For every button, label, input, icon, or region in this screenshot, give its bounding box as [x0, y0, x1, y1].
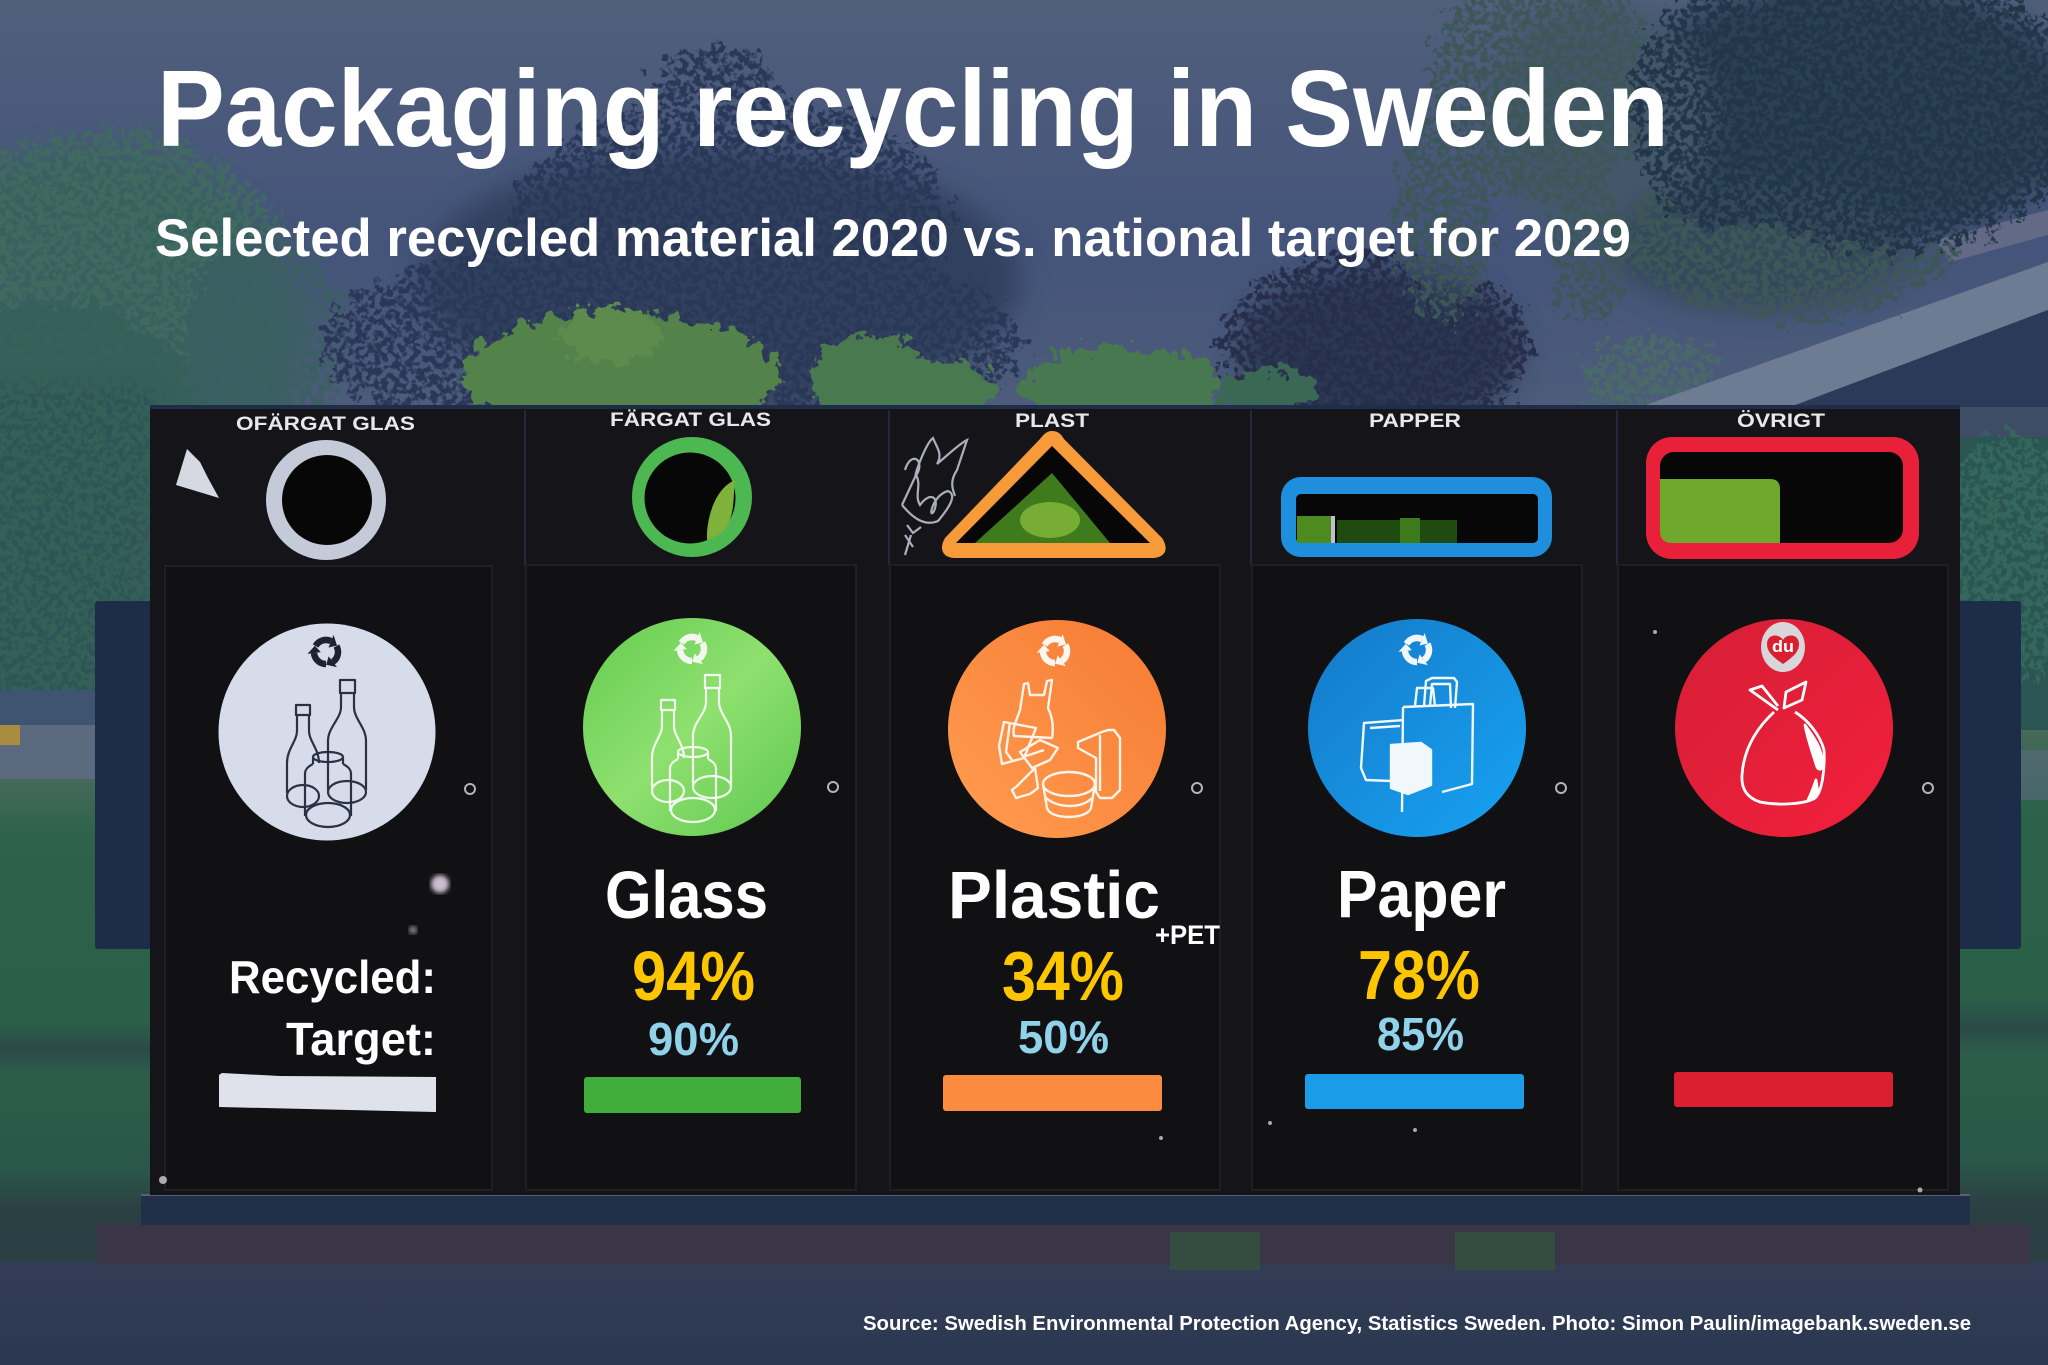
left park and lawn	[0, 690, 160, 1269]
colour strip: green	[584, 1077, 801, 1113]
foreground green bushes	[460, 307, 1320, 437]
badge: du	[1761, 622, 1805, 672]
bin: plastic	[902, 411, 1220, 1111]
legend label: Target: Target:	[286, 1013, 436, 1065]
leafy foliage: central dark tree	[320, 45, 1020, 455]
right foliage, building wall and lawn	[1935, 407, 2048, 1270]
value: target 85%: 85%	[1377, 1008, 1464, 1060]
label: PLAST: PLAST	[1015, 411, 1089, 432]
value: target 50%: 50%	[1018, 1011, 1109, 1063]
icon: glass disc with bottles	[218, 624, 436, 840]
opening: round grey ring	[266, 440, 386, 560]
value: recycled 34%: 34%	[1002, 937, 1124, 1015]
opening: red slot with foliage	[1646, 437, 1919, 559]
heading: Paper: Paper	[1337, 857, 1506, 932]
icon: green disc with bottles	[583, 618, 801, 836]
colour strip: orange	[943, 1075, 1162, 1111]
icon: orange disc with plastic items	[948, 620, 1166, 838]
foliage: top right tree	[1395, 0, 2048, 320]
label: OFÄRGAT GLAS: OFÄRGAT GLAS	[236, 414, 415, 435]
colour strip: red	[1674, 1072, 1893, 1107]
bin: colourless glass	[176, 414, 436, 1112]
bin: paper	[1281, 411, 1552, 1109]
label: ÖVRIGT: ÖVRIGT	[1737, 411, 1825, 432]
recycling station body	[150, 405, 1960, 1195]
badge: du: du	[1772, 637, 1794, 656]
soft tree masses	[0, 0, 2048, 740]
sticker remnant	[176, 449, 219, 498]
side panels of the recycling station	[95, 601, 2021, 949]
heading: Glass: Glass	[605, 858, 768, 933]
value: target 90%: 90%	[648, 1013, 739, 1065]
door panels	[165, 565, 1948, 1190]
note: +PET: +PET	[1155, 920, 1220, 950]
bin: other waste	[1646, 411, 1919, 1107]
road	[0, 1262, 2048, 1365]
graffiti tag	[902, 438, 967, 555]
far small tree	[1580, 334, 1720, 422]
reflections and specks on the doors	[159, 630, 1922, 1192]
colour strip: white	[219, 1073, 436, 1112]
value: recycled 78%: 78%	[1358, 936, 1480, 1014]
source line: Source: Swedish Environmental Protection Agency, Statistics Sweden. Photo: Simon Paulin/imagebank.sweden.se	[863, 1313, 1971, 1335]
door screws	[465, 782, 1933, 794]
icon: blue disc with paper bags	[1308, 619, 1526, 837]
label: FÄRGAT GLAS: FÄRGAT GLAS	[610, 410, 771, 431]
label: PAPPER: PAPPER	[1369, 411, 1461, 432]
subtitle: Selected recycled material 2020 vs. national target for 2029	[155, 209, 1631, 268]
icon: red disc with rubbish bag	[1675, 619, 1893, 837]
title: Packaging recycling in Sweden	[157, 48, 1669, 170]
opening: green ring with foliage	[632, 437, 752, 557]
bin: glass	[583, 410, 801, 1113]
heading: Plastic: Plastic	[948, 858, 1160, 933]
value: recycled 94%: 94%	[632, 937, 755, 1015]
leafy foliage: left green tree	[0, 130, 345, 700]
leafy foliage: right purple tree	[1220, 250, 1530, 440]
building roof	[1640, 262, 2048, 407]
colour strip: blue	[1305, 1074, 1524, 1109]
legend label: Recycled: Recycled:	[229, 951, 436, 1003]
plinth and bricks	[97, 1194, 2030, 1270]
opening: orange triangle with foliage	[942, 431, 1166, 558]
opening: blue slot with foliage	[1281, 477, 1552, 557]
